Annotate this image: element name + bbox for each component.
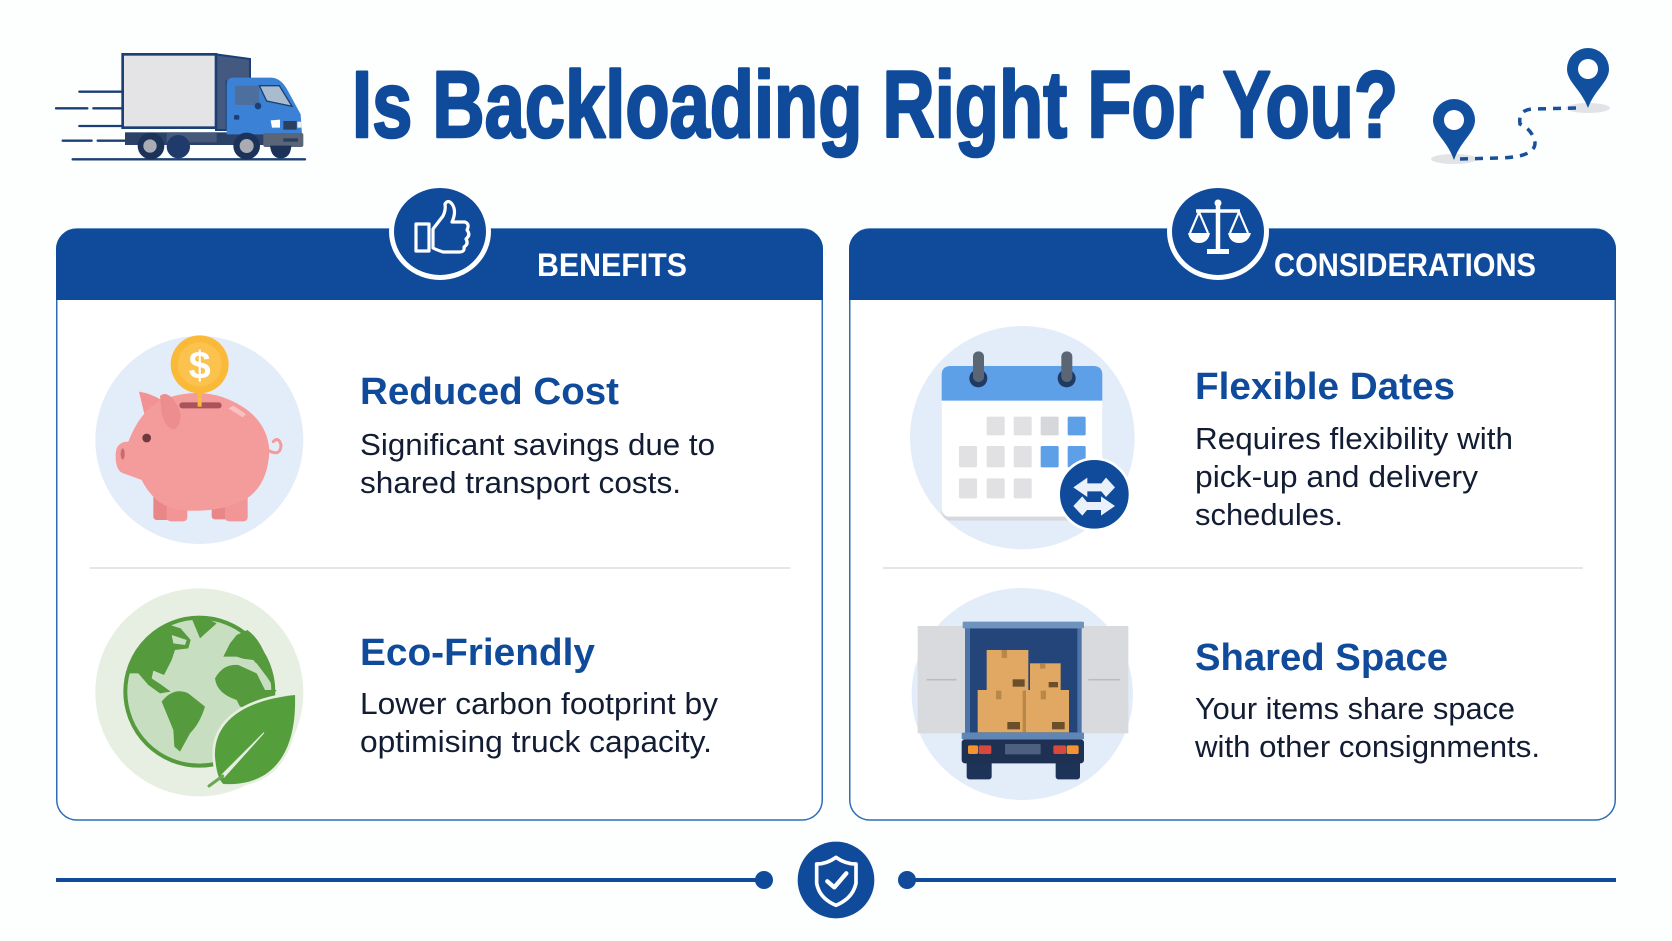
text: reduced cost: shared transport costs. (360, 465, 681, 500)
text: reduced cost: Significant savings due to (360, 427, 715, 462)
text: flexible dates: schedules. (1195, 497, 1343, 532)
text: flexible dates: pick-up and delivery (1195, 459, 1479, 494)
text: shared space (1194, 637, 1540, 764)
text: eco-friendly (360, 632, 719, 759)
icon: piggy bank: $ (189, 343, 211, 387)
text: shared space: with other consignments. (1194, 729, 1540, 764)
text: shared space: Your items share space (1195, 691, 1515, 726)
text: eco-friendly: Eco-Friendly (360, 632, 595, 674)
benefits header band (56, 229, 823, 300)
panel: considerations (849, 186, 1616, 820)
text: eco-friendly: optimising truck capacity. (360, 724, 712, 759)
text: reduced cost (360, 371, 715, 500)
text: eco-friendly: Lower carbon footprint by (360, 686, 719, 721)
text: flexible dates (1195, 366, 1513, 532)
footer rule with shield (56, 842, 1616, 918)
icon: route with map pins (1431, 48, 1610, 164)
text: reduced cost: Reduced Cost (360, 371, 619, 413)
considerations header band (849, 229, 1616, 300)
icon: shield check (798, 842, 874, 918)
text: flexible dates: Requires flexibility with (1195, 421, 1513, 456)
benefits heading: BENEFITS (537, 247, 687, 283)
icon: moving truck (56, 54, 305, 159)
icon: open truck with boxes (912, 588, 1133, 800)
icon: calendar with swap arrows (910, 326, 1135, 549)
icon: piggy bank (95, 335, 303, 544)
panel: benefits (56, 186, 823, 820)
text: shared space: Shared Space (1195, 637, 1448, 679)
icon: globe with leaf (95, 588, 303, 796)
considerations heading: CONSIDERATIONS (1274, 247, 1536, 283)
icon: balance scale (1170, 186, 1266, 278)
text: flexible dates: Flexible Dates (1195, 366, 1455, 408)
icon: thumbs up (392, 186, 488, 278)
